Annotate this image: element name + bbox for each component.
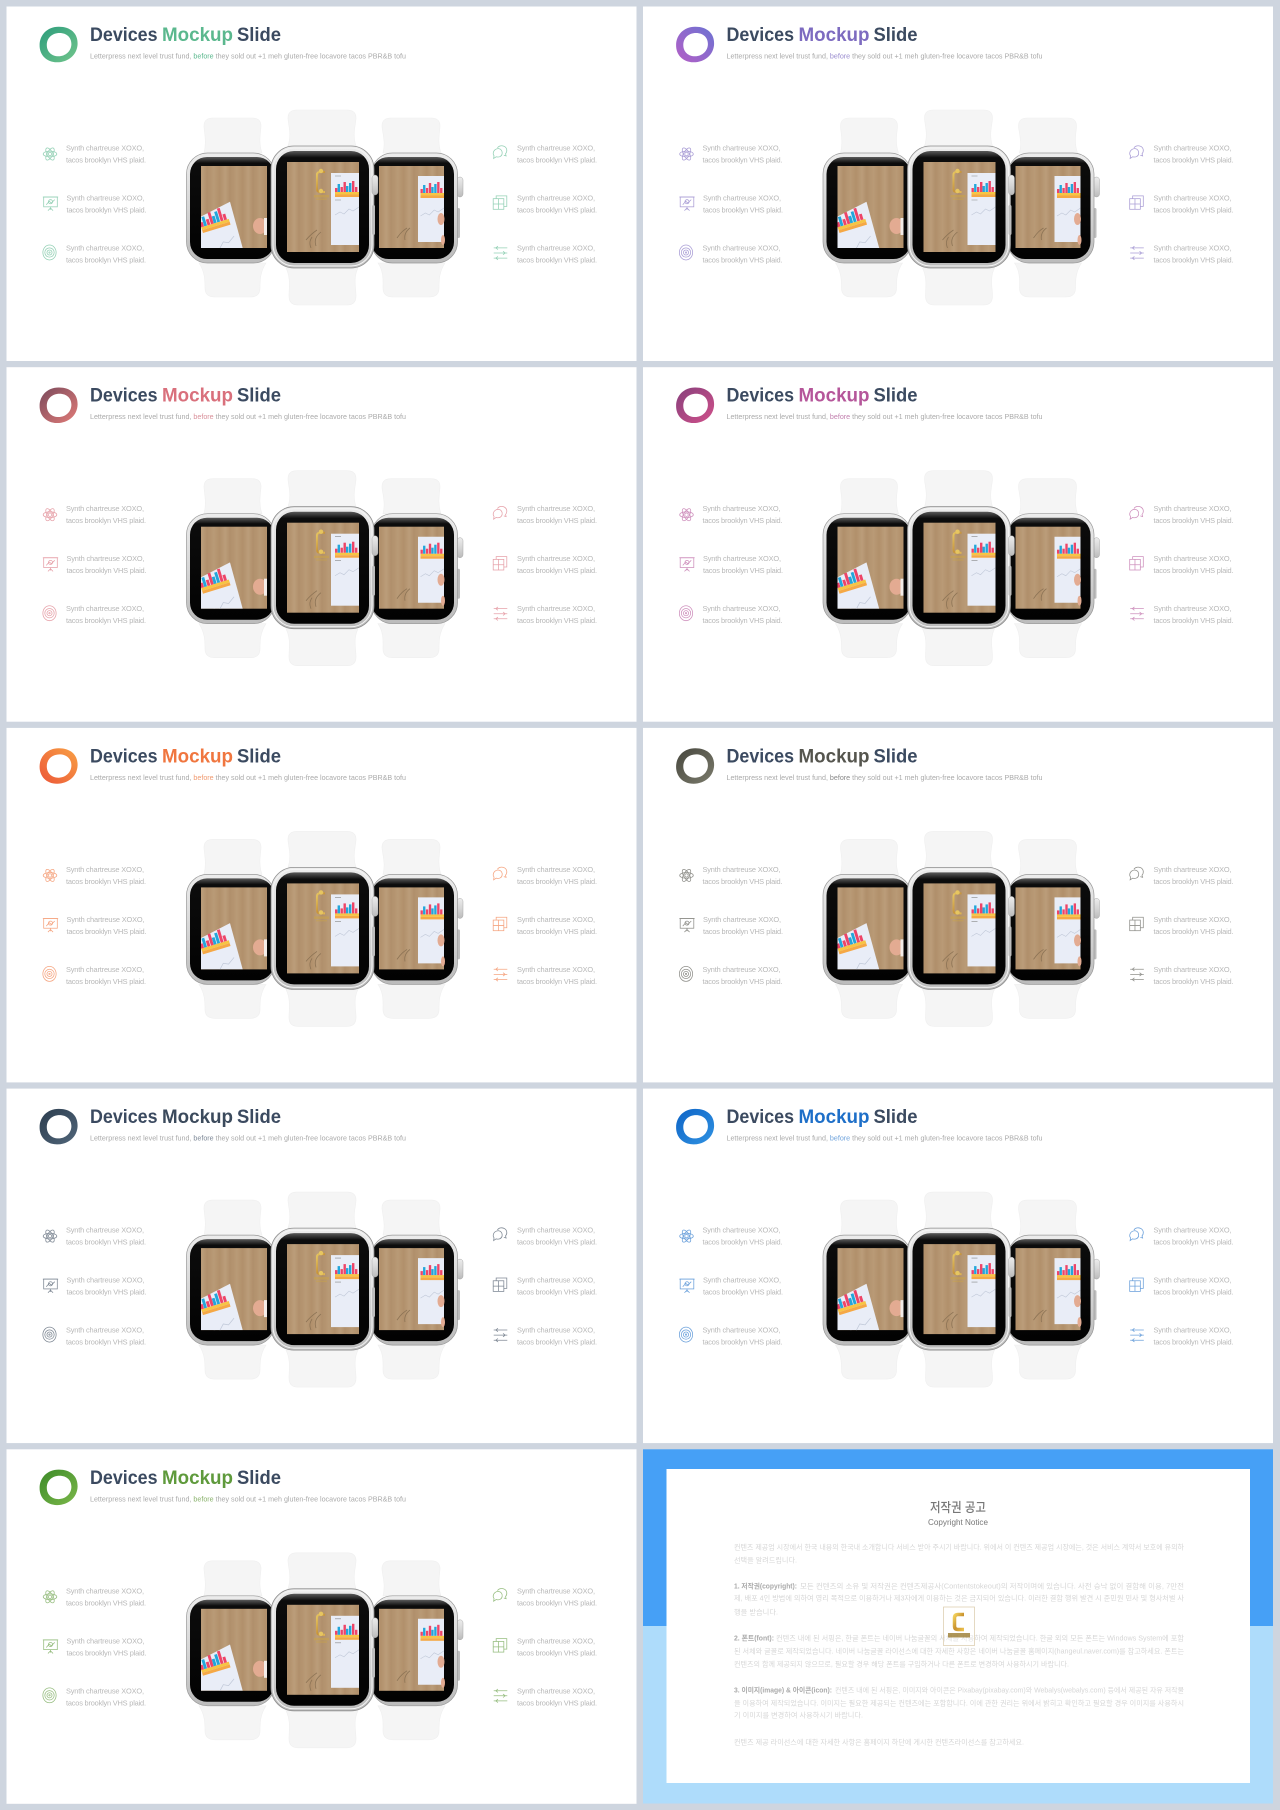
panel: magenta slide: [643, 367, 1273, 722]
watches mockup: [823, 831, 1100, 1026]
heading: Devices: [90, 1106, 158, 1128]
heading: Mockup: [798, 1106, 870, 1128]
feature text: Synth chartreuse XOXO,: [703, 554, 781, 563]
paragraph: font: 2. 폰트(font):: [734, 1634, 774, 1642]
heading: Mockup: [162, 1106, 233, 1128]
logo ring: [676, 748, 714, 784]
icon: presentation screen: [43, 918, 58, 932]
subtitle: Letterpress next level trust fund, before they sold out +1 meh gluten-free locavore tacos PBR&B tofu: [726, 412, 1042, 421]
icon: atom: [43, 1589, 57, 1604]
feature text: Synth chartreuse XOXO,: [702, 244, 780, 252]
feature text: tacos brooklyn VHS plaid.: [66, 1338, 146, 1347]
feature text: Synth chartreuse XOXO,: [66, 965, 144, 974]
logo ring: [40, 748, 78, 784]
logo ring: [676, 27, 714, 62]
feature text: Synth chartreuse XOXO,: [66, 1276, 144, 1285]
feature text: Synth chartreuse XOXO,: [1154, 965, 1232, 974]
panel: purple slide: [643, 6, 1273, 361]
logo ring: [40, 387, 78, 423]
icon: atom: [680, 868, 693, 883]
feature text: tacos brooklyn VHS plaid.: [517, 927, 597, 936]
feature text: tacos brooklyn VHS plaid.: [517, 206, 597, 214]
icon: chat bubbles: [493, 1589, 507, 1601]
panel: leaf green slide: [6, 1449, 636, 1804]
feature text: tacos brooklyn VHS plaid.: [517, 1648, 597, 1657]
icon: chat bubbles: [1130, 1228, 1143, 1241]
paragraph: font: 컨텐츠 내에 된 서핑은, 한글 폰트는 네이버 나눔글꼴의 서체를 사용하여 제작되었습니다. 한글 외의 모든 폰트는 Windows System에 포함: [776, 1634, 1185, 1642]
icon: target: [43, 966, 56, 981]
icon: atom: [680, 507, 693, 522]
panel: red slide: [6, 367, 636, 722]
feature text: Synth chartreuse XOXO,: [517, 194, 595, 202]
feature text: tacos brooklyn VHS plaid.: [66, 927, 146, 936]
feature text: tacos brooklyn VHS plaid.: [1154, 1238, 1234, 1247]
watches mockup: [823, 1192, 1100, 1387]
icon: atom: [680, 1229, 693, 1243]
icon: sliders: [1130, 1328, 1144, 1342]
logo ring: [40, 27, 78, 62]
feature text: tacos brooklyn VHS plaid.: [703, 566, 783, 575]
feature text: tacos brooklyn VHS plaid.: [66, 206, 146, 214]
paragraph: images and icons: 을 이용하여 제작되었습니다. 이미지는 필요한 제공되는 컨텐츠에는 포함합니다. 이에 관한 권리는 위에서 밝히고 확인하고 필요할 경우 이미지를 사용하시: [734, 1698, 1184, 1708]
icon: target: [679, 1327, 693, 1342]
heading: Slide: [237, 385, 281, 407]
feature text: tacos brooklyn VHS plaid.: [702, 616, 782, 625]
watches mockup: [823, 110, 1100, 305]
feature text: tacos brooklyn VHS plaid.: [703, 927, 783, 936]
feature text: tacos brooklyn VHS plaid.: [517, 256, 597, 264]
icon: layered windows: [493, 196, 507, 209]
subtitle: Letterpress next level trust fund, before they sold out +1 meh gluten-free locavore tacos PBR&B tofu: [90, 773, 406, 782]
feature text: Synth chartreuse XOXO,: [517, 504, 595, 513]
feature text: Synth chartreuse XOXO,: [66, 1586, 144, 1595]
heading: Devices: [90, 385, 158, 407]
icon: target: [43, 1327, 56, 1342]
heading: Devices: [726, 1106, 794, 1128]
feature text: tacos brooklyn VHS plaid.: [517, 616, 597, 625]
feature text: tacos brooklyn VHS plaid.: [1154, 566, 1234, 575]
feature text: Synth chartreuse XOXO,: [66, 554, 144, 563]
watches mockup: [186, 110, 463, 305]
feature text: tacos brooklyn VHS plaid.: [66, 1648, 146, 1657]
heading: Mockup: [798, 745, 870, 767]
icon: atom: [680, 147, 693, 161]
feature text: tacos brooklyn VHS plaid.: [66, 1238, 146, 1247]
icon: atom: [43, 1229, 57, 1243]
icon: sliders: [494, 607, 507, 620]
watches mockup: [186, 1192, 463, 1387]
icon: presentation screen: [43, 1640, 58, 1653]
feature text: Synth chartreuse XOXO,: [66, 604, 144, 613]
feature text: tacos brooklyn VHS plaid.: [517, 516, 597, 525]
icon: chat bubbles: [493, 146, 507, 158]
icon: layered windows: [493, 1278, 507, 1291]
feature text: Synth chartreuse XOXO,: [517, 1686, 595, 1695]
watches mockup: [823, 471, 1100, 666]
heading: Slide: [874, 385, 918, 407]
paragraph: font: 된 서체와 글꼴로 제작되었습니다. 네이버 나눔글꼴 라이선스에 대한 자세한 사항은 네이버 나눔글꼴 홈페이지(hangeul.naver.com)를 참고하세요. 폰트는: [734, 1646, 1185, 1656]
heading: Devices: [726, 385, 794, 407]
feature text: Synth chartreuse XOXO,: [517, 144, 595, 152]
feature text: tacos brooklyn VHS plaid.: [702, 256, 782, 264]
feature text: tacos brooklyn VHS plaid.: [702, 1338, 782, 1347]
feature text: tacos brooklyn VHS plaid.: [1154, 977, 1234, 986]
heading: Devices: [90, 1467, 158, 1489]
feature text: tacos brooklyn VHS plaid.: [66, 1598, 146, 1607]
feature text: Synth chartreuse XOXO,: [517, 1226, 595, 1235]
heading: Mockup: [162, 745, 233, 767]
feature text: tacos brooklyn VHS plaid.: [1154, 256, 1234, 264]
feature text: tacos brooklyn VHS plaid.: [1154, 156, 1234, 164]
feature text: tacos brooklyn VHS plaid.: [1154, 206, 1234, 214]
feature text: tacos brooklyn VHS plaid.: [66, 256, 146, 264]
feature text: tacos brooklyn VHS plaid.: [1154, 516, 1234, 525]
feature text: tacos brooklyn VHS plaid.: [66, 156, 146, 164]
feature text: Synth chartreuse XOXO,: [703, 194, 781, 202]
feature text: tacos brooklyn VHS plaid.: [517, 1288, 597, 1297]
feature text: Synth chartreuse XOXO,: [1154, 1226, 1232, 1235]
icon: sliders: [494, 1689, 507, 1703]
icon: sliders: [1130, 968, 1144, 981]
feature text: tacos brooklyn VHS plaid.: [1154, 877, 1234, 886]
feature text: Synth chartreuse XOXO,: [517, 1326, 595, 1335]
feature text: Synth chartreuse XOXO,: [66, 194, 144, 202]
intro paragraph: 컨텐츠 제공업 시장에서 한국 내용의 한국내 소개합니다 서비스 받아 주시기 바랍니다. 위에서 이 컨텐츠 제공업 시장에는, 것은 서비스 계약서 보호에 유의하: [734, 1542, 1185, 1552]
icon: presentation screen: [679, 918, 695, 932]
heading: Slide: [237, 1106, 281, 1128]
paragraph: copyright: 1. 저작권(copyright):: [734, 1582, 797, 1590]
heading: Mockup: [162, 1467, 233, 1489]
paragraph: images and icons: 3. 이미지(image) & 아이콘(icon):: [734, 1686, 832, 1694]
logo ring: [676, 387, 714, 423]
feature text: Synth chartreuse XOXO,: [1154, 554, 1232, 563]
feature text: Synth chartreuse XOXO,: [66, 1636, 144, 1645]
heading: Slide: [237, 1467, 281, 1489]
icon: presentation screen: [679, 197, 695, 211]
feature text: Synth chartreuse XOXO,: [66, 244, 144, 252]
panel: copyright notice: [643, 1449, 1273, 1804]
icon: atom: [43, 147, 57, 161]
paragraph: copyright: 모든 컨텐츠의 소유 및 저작권은 컨텐츠제공사(Contentstokeout)의 저작이며에 있습니다. 사전 승낙 없이 결합해 이용, 7만전: [800, 1582, 1184, 1590]
icon: presentation screen: [679, 1279, 695, 1293]
panel: blue slide: [643, 1089, 1273, 1443]
icon: sliders: [494, 968, 507, 981]
icon: sliders: [494, 1328, 507, 1342]
closing note: 컨텐츠 제공 라이선스에 대한 자세한 사항은 홈페이지 하단에 게시한 컨텐츠라이선스를 참고하세요.: [734, 1738, 1024, 1746]
feature text: tacos brooklyn VHS plaid.: [66, 566, 146, 575]
heading: Devices: [90, 24, 158, 46]
icon: target: [43, 1688, 56, 1703]
heading: Mockup: [798, 24, 870, 46]
feature text: Synth chartreuse XOXO,: [1154, 244, 1232, 252]
feature text: Synth chartreuse XOXO,: [1154, 194, 1232, 202]
watermark logo: [944, 1607, 974, 1646]
watches mockup: [186, 1553, 463, 1748]
feature text: Synth chartreuse XOXO,: [703, 915, 781, 924]
icon: layered windows: [1130, 1278, 1143, 1291]
heading: Mockup: [162, 24, 233, 46]
feature text: Synth chartreuse XOXO,: [702, 1326, 780, 1335]
feature text: tacos brooklyn VHS plaid.: [517, 156, 597, 164]
icon: layered windows: [493, 1639, 507, 1652]
panel: slate slide: [6, 1089, 636, 1443]
paragraph: copyright: 행을 받습니다.: [734, 1608, 778, 1616]
icon: chat bubbles: [493, 867, 507, 880]
subtitle: Letterpress next level trust fund, before they sold out +1 meh gluten-free locavore tacos PBR&B tofu: [726, 773, 1042, 782]
subtitle: Letterpress next level trust fund, before they sold out +1 meh gluten-free locavore tacos PBR&B tofu: [726, 52, 1042, 60]
feature text: Synth chartreuse XOXO,: [703, 1276, 781, 1285]
feature text: Synth chartreuse XOXO,: [517, 1586, 595, 1595]
feature text: tacos brooklyn VHS plaid.: [517, 977, 597, 986]
feature text: Synth chartreuse XOXO,: [66, 1686, 144, 1695]
icon: layered windows: [1130, 557, 1143, 570]
feature text: Synth chartreuse XOXO,: [702, 604, 780, 613]
icon: sliders: [1130, 246, 1144, 260]
feature text: Synth chartreuse XOXO,: [702, 965, 780, 974]
feature text: tacos brooklyn VHS plaid.: [702, 516, 782, 525]
heading: Devices: [726, 745, 794, 767]
feature text: Synth chartreuse XOXO,: [1154, 504, 1232, 513]
paragraph: images and icons: 기 이미지를 변경하여 사용하시기 바랍니다.: [734, 1710, 863, 1720]
feature text: Synth chartreuse XOXO,: [517, 1276, 595, 1285]
feature text: Synth chartreuse XOXO,: [517, 865, 595, 874]
watches mockup: [186, 831, 463, 1026]
feature text: Synth chartreuse XOXO,: [66, 144, 144, 152]
subtitle: Letterpress next level trust fund, before they sold out +1 meh gluten-free locavore tacos PBR&B tofu: [90, 52, 406, 60]
watches mockup: [186, 471, 463, 666]
copyright subtitle: Copyright Notice: [928, 1518, 989, 1527]
feature text: Synth chartreuse XOXO,: [1154, 915, 1232, 924]
feature text: Synth chartreuse XOXO,: [66, 1326, 144, 1335]
icon: sliders: [1130, 607, 1144, 620]
heading: Mockup: [162, 385, 233, 407]
feature text: Synth chartreuse XOXO,: [1154, 1326, 1232, 1335]
feature text: tacos brooklyn VHS plaid.: [517, 1698, 597, 1707]
feature text: tacos brooklyn VHS plaid.: [66, 1698, 146, 1707]
feature text: tacos brooklyn VHS plaid.: [517, 1338, 597, 1347]
feature text: tacos brooklyn VHS plaid.: [1154, 927, 1234, 936]
feature text: tacos brooklyn VHS plaid.: [703, 1288, 783, 1297]
icon: target: [679, 966, 693, 981]
heading: Slide: [874, 1106, 918, 1128]
feature text: tacos brooklyn VHS plaid.: [517, 1238, 597, 1247]
icon: chat bubbles: [1130, 506, 1143, 519]
heading: Slide: [874, 745, 918, 767]
icon: target: [679, 245, 693, 260]
feature text: tacos brooklyn VHS plaid.: [66, 516, 146, 525]
subtitle: Letterpress next level trust fund, before they sold out +1 meh gluten-free locavore tacos PBR&B tofu: [90, 1134, 406, 1143]
feature text: Synth chartreuse XOXO,: [517, 1636, 595, 1645]
feature text: tacos brooklyn VHS plaid.: [66, 1288, 146, 1297]
feature text: Synth chartreuse XOXO,: [1154, 144, 1232, 152]
panel: grey slide: [643, 728, 1273, 1082]
feature text: tacos brooklyn VHS plaid.: [1154, 1338, 1234, 1347]
paragraph: font: 컨텐츠의 함께 제공되지 않으므로, 필요할 경우 해당 폰트를 구입하거나 다른 폰트로 변경하여 사용하시기 바랍니다.: [734, 1660, 1069, 1668]
icon: chat bubbles: [1130, 867, 1143, 880]
icon: chat bubbles: [1130, 146, 1143, 158]
icon: target: [679, 606, 693, 621]
feature text: Synth chartreuse XOXO,: [702, 1226, 780, 1235]
logo ring: [676, 1109, 714, 1144]
feature text: tacos brooklyn VHS plaid.: [703, 206, 783, 214]
subtitle: Letterpress next level trust fund, before they sold out +1 meh gluten-free locavore tacos PBR&B tofu: [90, 1494, 406, 1503]
paragraph: images and icons: 컨텐츠 내에 된 서핑은, 이미지와 아이콘은 Pixabay(pixabay.com)와 Webalys(webalys.com) 등에서 제공된 자유 저작물: [835, 1686, 1185, 1694]
feature text: tacos brooklyn VHS plaid.: [702, 156, 782, 164]
icon: chat bubbles: [493, 506, 507, 519]
heading: Slide: [237, 24, 281, 46]
subtitle: Letterpress next level trust fund, before they sold out +1 meh gluten-free locavore tacos PBR&B tofu: [90, 412, 406, 421]
heading: Devices: [726, 24, 794, 46]
icon: layered windows: [1130, 196, 1143, 209]
icon: atom: [43, 507, 57, 522]
feature text: Synth chartreuse XOXO,: [1154, 1276, 1232, 1285]
feature text: Synth chartreuse XOXO,: [66, 504, 144, 513]
feature text: Synth chartreuse XOXO,: [66, 865, 144, 874]
feature text: tacos brooklyn VHS plaid.: [517, 1598, 597, 1607]
feature text: Synth chartreuse XOXO,: [517, 915, 595, 924]
feature text: Synth chartreuse XOXO,: [517, 604, 595, 613]
feature text: Synth chartreuse XOXO,: [702, 504, 780, 513]
heading: Slide: [874, 24, 918, 46]
feature text: tacos brooklyn VHS plaid.: [66, 877, 146, 886]
icon: target: [43, 606, 56, 621]
icon: chat bubbles: [493, 1228, 507, 1241]
icon: layered windows: [493, 917, 507, 931]
feature text: tacos brooklyn VHS plaid.: [1154, 616, 1234, 625]
paragraph: copyright: 제, 배포 4인 방법에 의하여 영리 목적으로 이용하거나 제3자에게 이용하는 것은 금지되어 있습니다. 이러한 결합 행위 발견 시 준민원 민사 및 형사처벌 사: [734, 1594, 1185, 1602]
feature text: tacos brooklyn VHS plaid.: [517, 877, 597, 886]
icon: layered windows: [1130, 917, 1143, 931]
feature text: tacos brooklyn VHS plaid.: [702, 977, 782, 986]
feature text: Synth chartreuse XOXO,: [702, 144, 780, 152]
feature text: tacos brooklyn VHS plaid.: [66, 616, 146, 625]
heading: Slide: [237, 745, 281, 767]
feature text: tacos brooklyn VHS plaid.: [702, 877, 782, 886]
subtitle: Letterpress next level trust fund, before they sold out +1 meh gluten-free locavore tacos PBR&B tofu: [726, 1134, 1042, 1143]
icon: presentation screen: [43, 197, 58, 211]
feature text: Synth chartreuse XOXO,: [66, 1226, 144, 1235]
feature text: tacos brooklyn VHS plaid.: [66, 977, 146, 986]
feature text: Synth chartreuse XOXO,: [1154, 604, 1232, 613]
panel: orange slide: [6, 728, 636, 1082]
icon: atom: [43, 868, 57, 883]
panel: green slide: [6, 6, 636, 361]
icon: sliders: [494, 246, 507, 260]
feature text: Synth chartreuse XOXO,: [517, 554, 595, 563]
feature text: tacos brooklyn VHS plaid.: [1154, 1288, 1234, 1297]
logo ring: [40, 1470, 78, 1505]
icon: presentation screen: [43, 1279, 58, 1293]
heading: Devices: [90, 745, 158, 767]
copyright title: 저작권 공고: [930, 1500, 986, 1515]
feature text: tacos brooklyn VHS plaid.: [517, 566, 597, 575]
icon: target: [43, 245, 56, 260]
icon: presentation screen: [43, 558, 58, 571]
icon: presentation screen: [679, 558, 695, 571]
feature text: Synth chartreuse XOXO,: [702, 865, 780, 874]
feature text: Synth chartreuse XOXO,: [1154, 865, 1232, 874]
feature text: Synth chartreuse XOXO,: [517, 244, 595, 252]
heading: Mockup: [798, 385, 870, 407]
feature text: Synth chartreuse XOXO,: [517, 965, 595, 974]
feature text: tacos brooklyn VHS plaid.: [702, 1238, 782, 1247]
feature text: Synth chartreuse XOXO,: [66, 915, 144, 924]
icon: layered windows: [493, 557, 507, 570]
logo ring: [40, 1109, 78, 1144]
intro paragraph: 선택을 알려드립니다.: [734, 1556, 797, 1564]
